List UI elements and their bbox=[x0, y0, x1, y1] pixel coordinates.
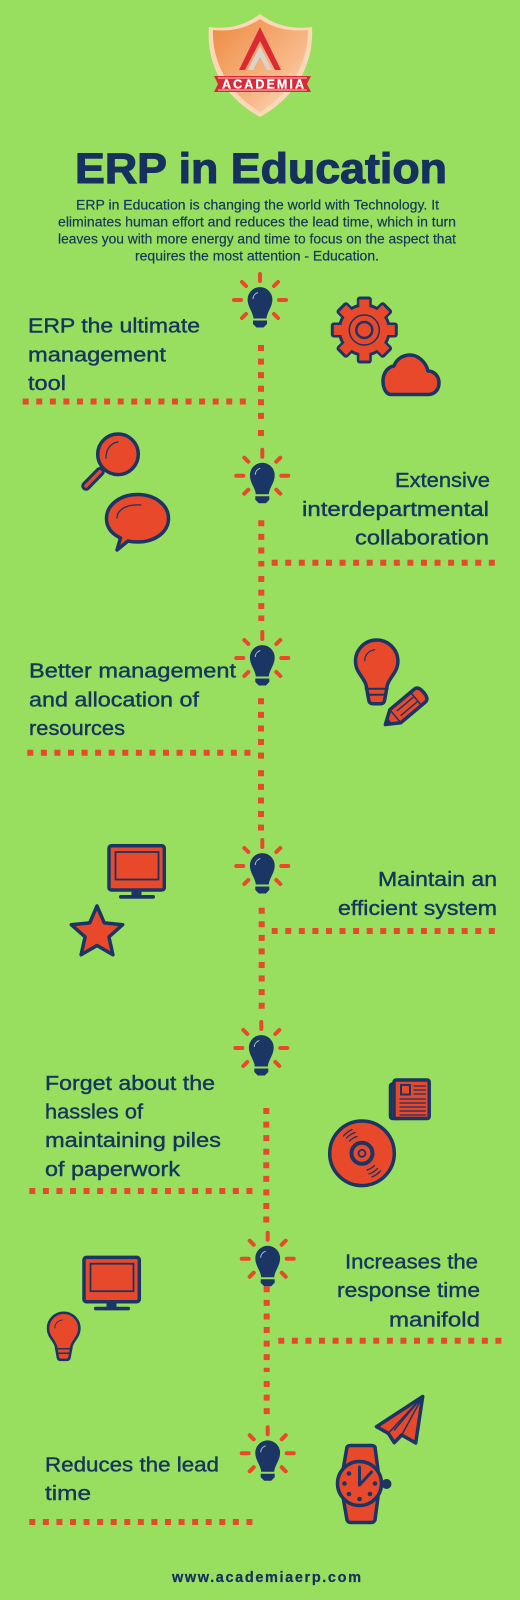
text: Forget about the hassles of maintaining piles of paperwork: maintaining piles bbox=[45, 1130, 221, 1152]
text: Extensive interdepartmental collaboration: interdepartmental bbox=[302, 499, 489, 521]
text: Reduces the lead time: Reduces the lead bbox=[45, 1455, 219, 1477]
intro text bbox=[58, 198, 456, 264]
icon: monitor bbox=[109, 846, 164, 899]
text: Extensive interdepartmental collaboration: Extensive bbox=[395, 470, 490, 492]
text: Better management and allocation of resources: and allocation of bbox=[29, 690, 200, 712]
text: Increases the response time manifold: Increases the bbox=[345, 1252, 478, 1274]
icon: timeline bulb 1 bbox=[234, 274, 286, 328]
icon: timeline bulb 6 bbox=[242, 1233, 294, 1286]
icon: wristwatch bbox=[338, 1446, 392, 1522]
icon: timeline bulb 2 bbox=[236, 450, 288, 503]
icon: paper plane bbox=[376, 1396, 423, 1443]
text: Extensive interdepartmental collaboration: collaboration bbox=[355, 527, 489, 549]
text: Better management and allocation of resources: Better management bbox=[29, 661, 237, 683]
text: Maintain an efficient system: efficient system bbox=[338, 898, 497, 920]
text: ERP the ultimate management tool: ERP the ultimate bbox=[28, 316, 200, 338]
dotted connector 3 bbox=[27, 698, 261, 830]
icon: timeline bulb 4 bbox=[236, 840, 288, 894]
intro text: leaves you with more energy and time to focus on the aspect that bbox=[58, 232, 456, 246]
intro text: eliminates human effort and reduces the lead time, which in turn bbox=[58, 214, 456, 230]
text: Maintain an efficient system: Maintain an bbox=[378, 869, 497, 891]
intro text: ERP in Education is changing the world with Technology. It bbox=[76, 198, 439, 212]
icon: magnifying glass bbox=[86, 434, 138, 486]
text: Forget about the hassles of maintaining piles of paperwork: Forget about the bbox=[45, 1073, 215, 1095]
dotted connector 5 bbox=[29, 1108, 266, 1223]
dotted connector 6 bbox=[267, 1286, 502, 1416]
step 2 bbox=[86, 434, 495, 621]
icon: timeline bulb 5 bbox=[235, 1022, 287, 1076]
text: Reduces the lead time bbox=[45, 1455, 219, 1505]
text: Reduces the lead time: time bbox=[45, 1483, 91, 1505]
icon: star bbox=[71, 906, 123, 955]
icon: small light bulb bbox=[48, 1313, 79, 1360]
step 5 bbox=[29, 1022, 429, 1223]
text: Extensive interdepartmental collaboration bbox=[302, 470, 490, 549]
logo: Academia shield bbox=[209, 14, 312, 117]
step 7 bbox=[29, 1396, 423, 1522]
text: ERP the ultimate management tool: management bbox=[28, 344, 167, 366]
dotted connector 4 bbox=[262, 908, 495, 1012]
step 1 bbox=[23, 274, 439, 436]
dotted connector 7 bbox=[29, 1519, 253, 1525]
icon: speech bubble bbox=[106, 494, 168, 550]
title: ERP in Education bbox=[75, 145, 447, 193]
icon: gear bbox=[331, 296, 398, 364]
text: Better management and allocation of resources: resources bbox=[29, 718, 125, 740]
icon: timeline bulb 3 bbox=[236, 632, 288, 686]
icon: disc bbox=[330, 1121, 394, 1186]
text: Maintain an efficient system bbox=[338, 869, 497, 920]
icon: newspaper bbox=[390, 1080, 429, 1118]
icon: monitor bbox=[84, 1257, 139, 1310]
text: Better management and allocation of resources bbox=[29, 661, 237, 740]
logo wordmark: ACADEMIA bbox=[222, 78, 304, 92]
text: ERP the ultimate management tool bbox=[28, 316, 200, 395]
step 6 bbox=[48, 1233, 502, 1416]
text: ERP the ultimate management tool: tool bbox=[28, 373, 66, 395]
text: Increases the response time manifold: manifold bbox=[389, 1310, 480, 1332]
intro text: requires the most attention - Education. bbox=[135, 248, 379, 264]
text: Forget about the hassles of maintaining piles of paperwork: of paperwork bbox=[45, 1159, 181, 1181]
step 4 bbox=[71, 840, 497, 1012]
text: Forget about the hassles of maintaining piles of paperwork bbox=[45, 1073, 221, 1181]
text: Forget about the hassles of maintaining piles of paperwork: hassles of bbox=[45, 1102, 143, 1124]
dotted connector 2 bbox=[258, 520, 495, 621]
dotted connector 1 bbox=[23, 345, 264, 436]
icon: cloud bbox=[383, 355, 439, 394]
footer url: www.academiaerp.com bbox=[171, 1570, 361, 1586]
icon: light bulb bbox=[356, 640, 398, 704]
step 3 bbox=[27, 632, 429, 830]
icon: pencil bbox=[380, 686, 429, 731]
text: Increases the response time manifold bbox=[337, 1252, 480, 1332]
text: Increases the response time manifold: response time bbox=[337, 1280, 480, 1302]
icon: timeline bulb 7 bbox=[242, 1427, 294, 1481]
